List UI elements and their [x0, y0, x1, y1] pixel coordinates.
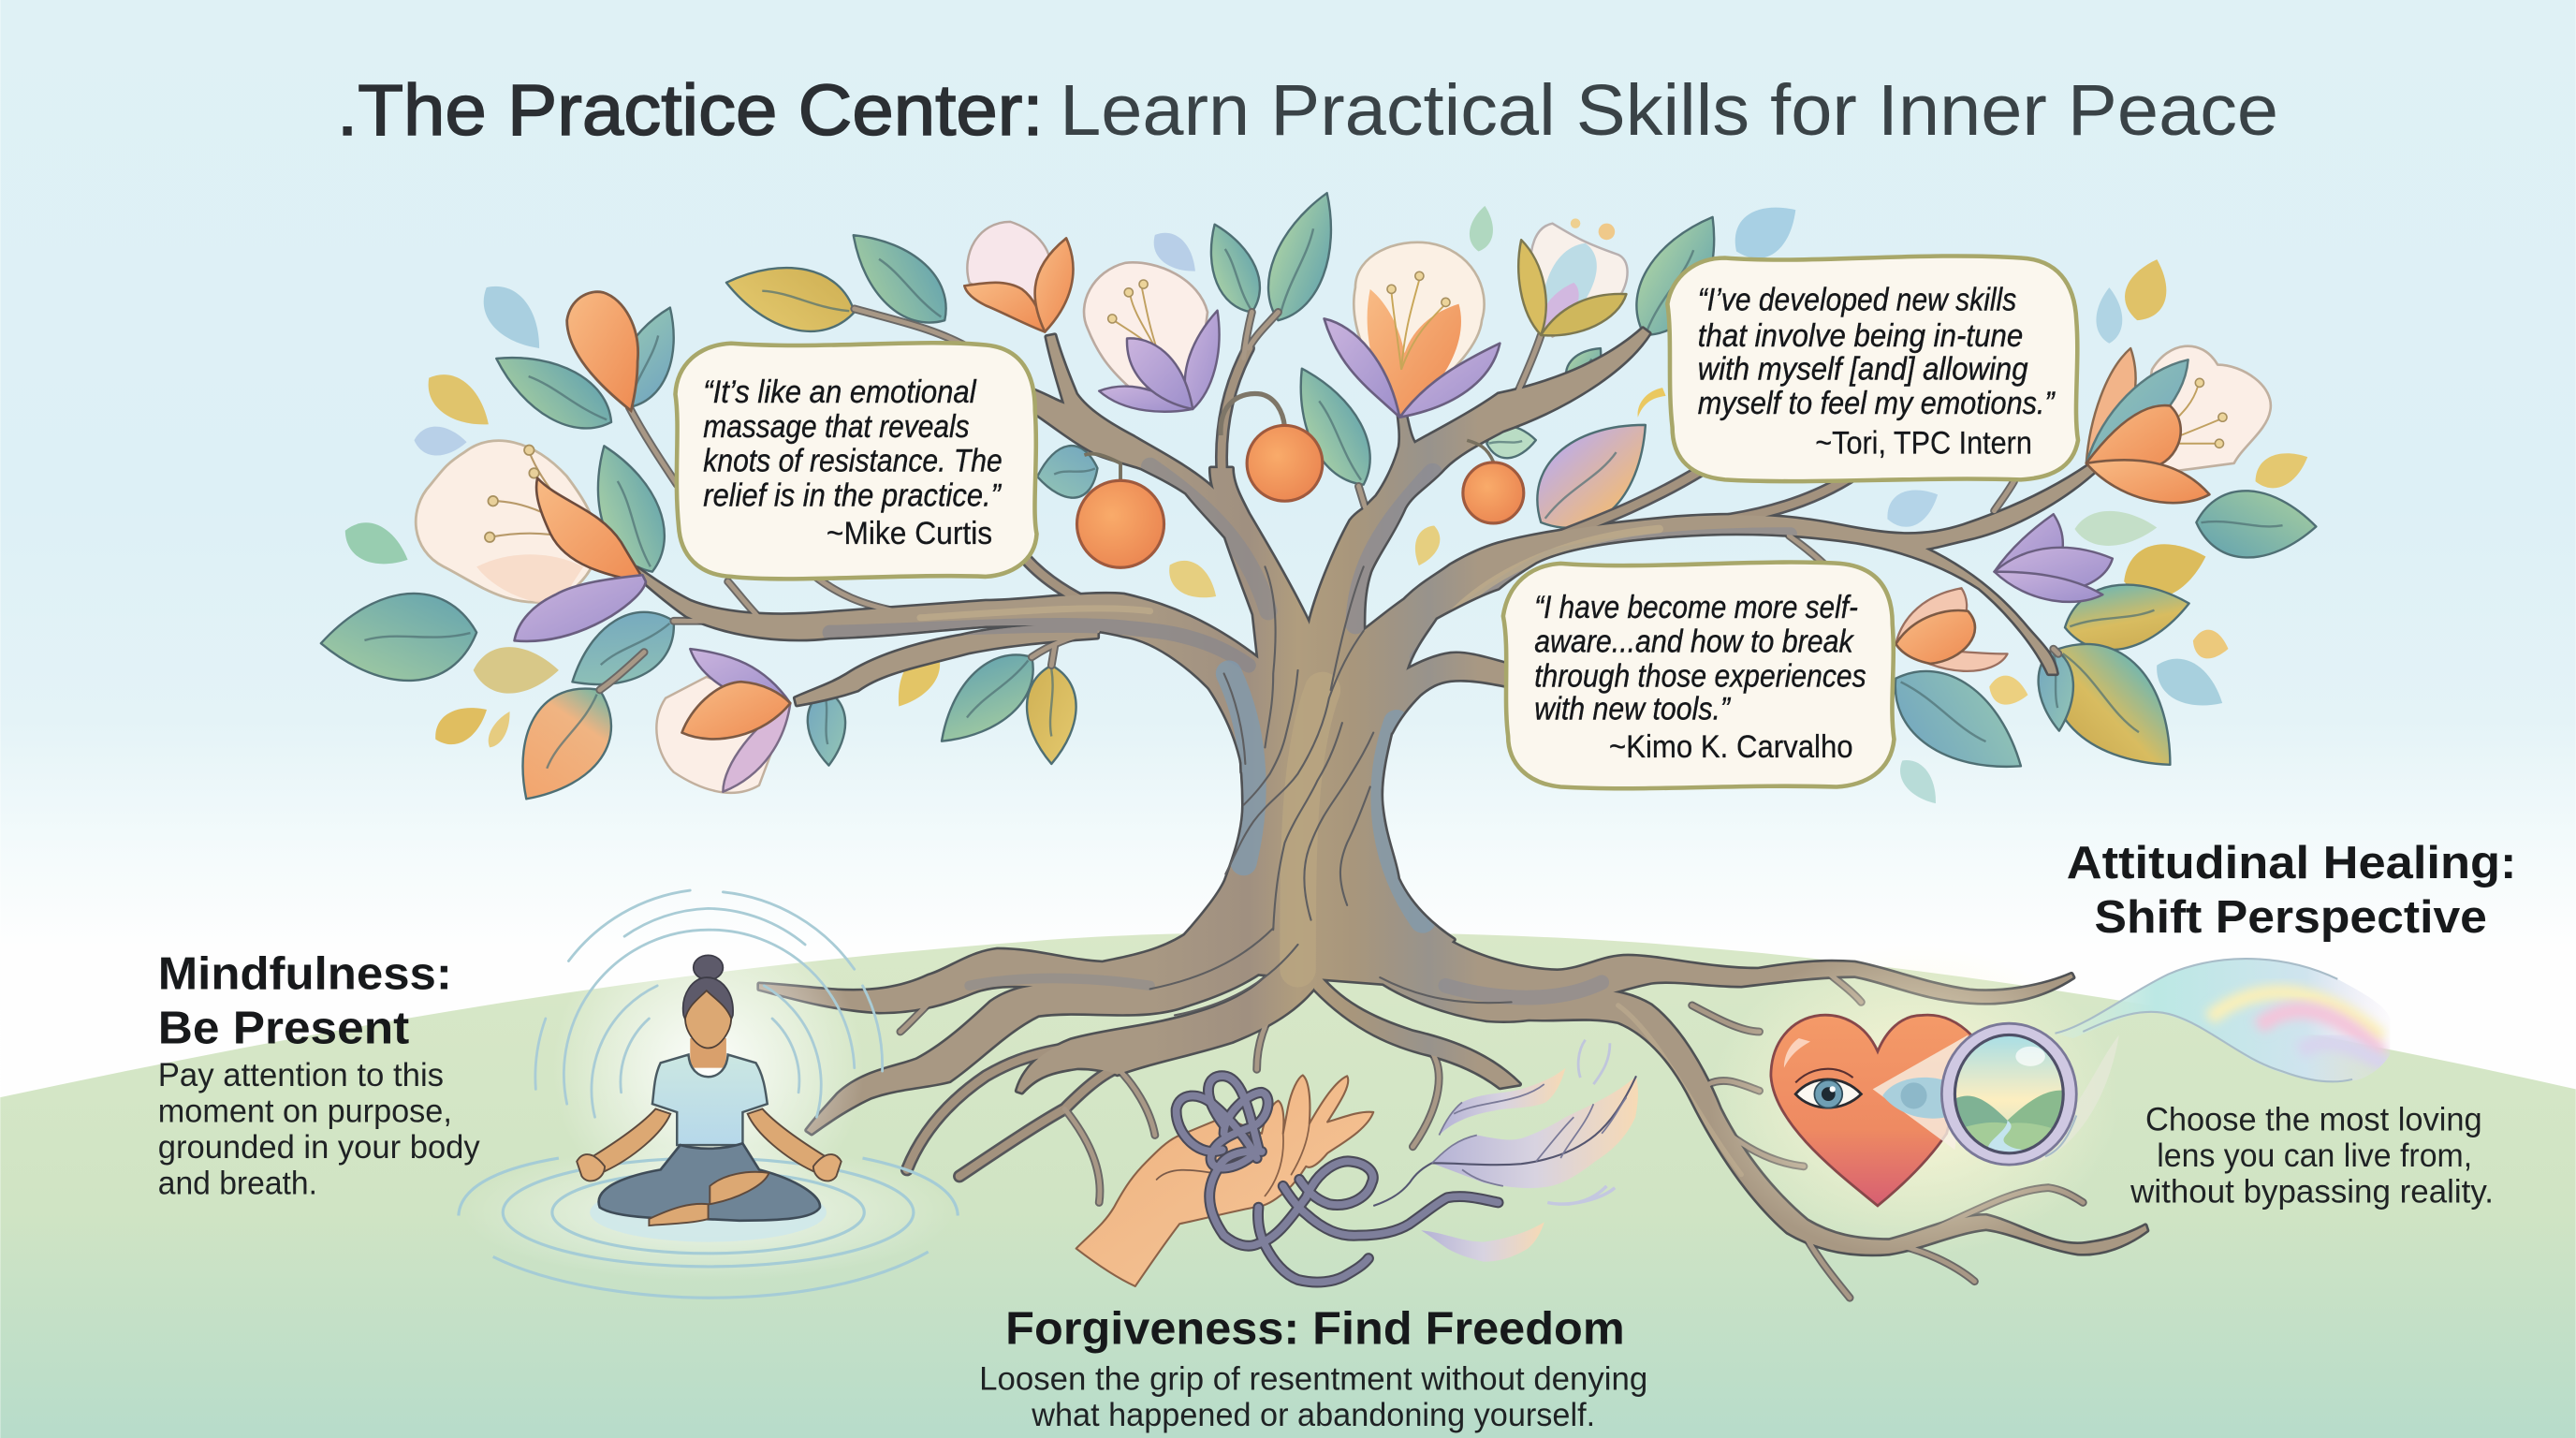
icon: heart with eye and lens: [1708, 945, 2390, 1256]
text: Attitudinal Healing: lens you can live from,: [2157, 1137, 2472, 1174]
quote callout: Tori: “I’ve developed new skills: [1698, 283, 2016, 318]
icon: hand releasing knotted ribbon: [1076, 1075, 1499, 1286]
quote callout: Tori: with myself [and] allowing: [1698, 351, 2028, 387]
floating pale leaves: [337, 191, 2314, 812]
flower: orange bud: [567, 292, 638, 411]
icon: meditating figure with ripples: [459, 890, 958, 1298]
flower: purple and cream blossom: [1084, 262, 1220, 412]
quote callout: Tori: myself to feel my emotions.”: [1698, 386, 2056, 421]
quote callout: Kimo K. Carvalho: with new tools.”: [1534, 692, 1731, 727]
text: Mindfulness: [158, 948, 480, 1202]
quote callout: Tori: that involve being in-tune: [1698, 318, 2023, 354]
icon: floating feathers: [1373, 1040, 1638, 1262]
text: Attitudinal Healing: without bypassing reality.: [2130, 1173, 2494, 1210]
text: Forgiveness: Loosen the grip of resentment without denying: [979, 1360, 1647, 1397]
flower: purple tulip: [1995, 514, 2113, 602]
quote callout: Mike Curtis: [675, 343, 1037, 579]
text: Attitudinal Healing: [2067, 838, 2517, 1210]
rainbow ribbon: [2037, 959, 2390, 1163]
flower: orange tulip: [1895, 588, 2008, 671]
text: Mindfulness: Pay attention to this: [158, 1057, 444, 1093]
quote callout: Mike Curtis: “It’s like an emotional: [703, 374, 977, 410]
bark shading: [829, 466, 1791, 1175]
flower: right blossom: [2086, 346, 2271, 503]
bark lines: [1150, 566, 1512, 1015]
flower: teal and gold blossom: [1518, 224, 1628, 337]
text: Mindfulness: Mindfulness:: [158, 948, 452, 999]
quote callout: Kimo K. Carvalho: [1503, 563, 1894, 788]
text: Mindfulness: moment on purpose,: [158, 1093, 452, 1129]
text: Attitudinal Healing: Attitudinal Healing:: [2067, 838, 2517, 888]
text: Attitudinal Healing: Choose the most loving: [2145, 1101, 2482, 1137]
text: Forgiveness: Forgiveness: Find Freedom: [1005, 1303, 1625, 1354]
text: Mindfulness: grounded in your body: [158, 1129, 480, 1166]
text: Attitudinal Healing: Shift Perspective: [2095, 892, 2487, 943]
tree trunk, branches and roots: [600, 309, 2147, 1298]
quote callout: Mike Curtis: knots of resistance. The: [703, 444, 1003, 479]
flower: large left blossom: [416, 441, 646, 641]
quote callout: Tori: ~Tori, TPC Intern: [1815, 425, 2032, 461]
quote callout: Kimo K. Carvalho: through those experiences: [1534, 658, 1866, 694]
quote callout: Tori: [1667, 256, 2078, 481]
title: Learn Practical Skills for Inner Peace: [1060, 70, 2278, 151]
quote callout: Kimo K. Carvalho: aware...and how to break: [1534, 624, 1854, 660]
quote callout: Kimo K. Carvalho: “I have become more self-: [1534, 590, 1858, 625]
text: Mindfulness: Be Present: [158, 1003, 409, 1053]
leaves on the branches: [318, 183, 2318, 821]
quote callout: Kimo K. Carvalho: ~Kimo K. Carvalho: [1609, 729, 1853, 765]
title: [337, 70, 2278, 151]
quote callout: Mike Curtis: massage that reveals: [703, 409, 970, 445]
flower: top center blossom: [1325, 242, 1500, 418]
green hill: [0, 932, 2576, 1438]
text: Mindfulness: and breath.: [158, 1166, 317, 1202]
text: Forgiveness: what happened or abandoning yourself.: [1031, 1397, 1595, 1433]
text: Forgiveness: [979, 1303, 1647, 1433]
fruits: [1077, 394, 1524, 567]
flower: top orange blossom: [964, 222, 1073, 331]
quote callout: Mike Curtis: ~Mike Curtis: [827, 516, 992, 551]
quote callout: Mike Curtis: relief is in the practice.”: [703, 477, 1002, 513]
flower: lower left blossom: [656, 649, 790, 793]
title: .The Practice Center:: [337, 70, 1044, 151]
